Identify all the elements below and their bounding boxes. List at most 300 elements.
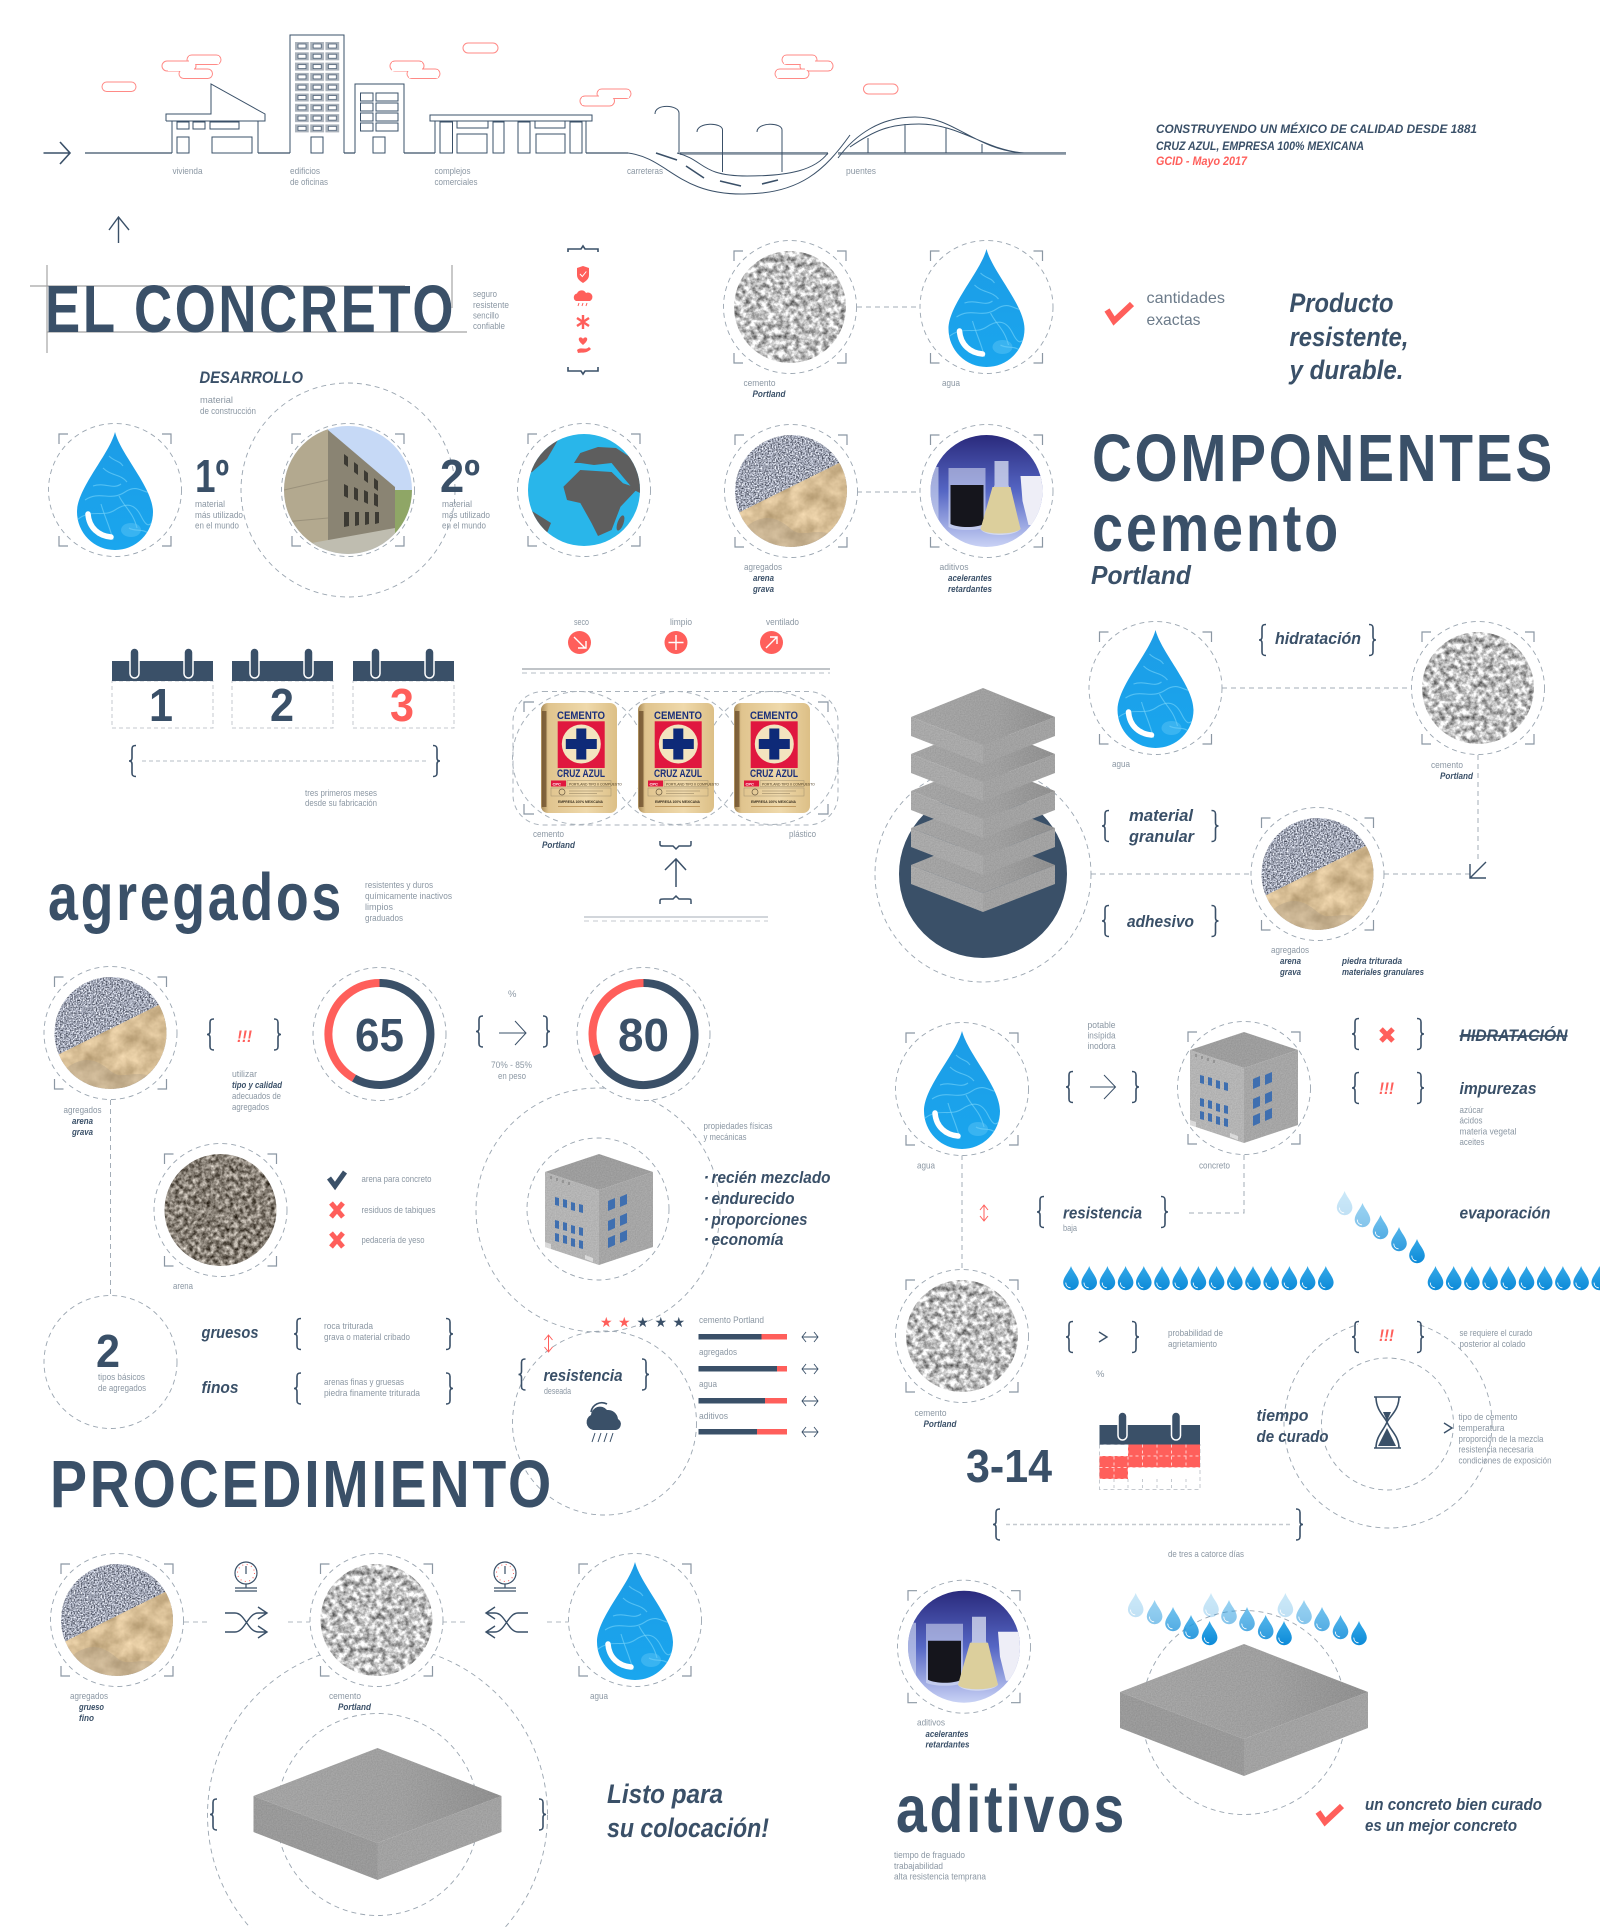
properties list: endurecido — [712, 1189, 794, 1208]
water drop — [920, 240, 1053, 374]
heading: desarrollo: DESARROLLO — [200, 368, 303, 387]
quality note: tipo y calidad — [232, 1080, 282, 1091]
sand checklist: residuos de tabiques — [362, 1205, 436, 1216]
icon: mix arrows left — [225, 1607, 267, 1638]
properties list: · — [704, 1168, 709, 1187]
ingredient labels: agua — [942, 378, 961, 389]
warning brace — [207, 1019, 281, 1050]
rating stars: ★ — [636, 1314, 649, 1330]
water properties: inodora — [1088, 1041, 1116, 1052]
falling water drops — [1128, 1593, 1367, 1645]
cement bag 1: CPC — [552, 782, 561, 786]
bag labels — [533, 829, 816, 851]
coarse aggregates: gruesos — [201, 1323, 258, 1342]
component labels: arena — [1280, 956, 1301, 967]
cement photo — [310, 1554, 443, 1686]
arrow brace: % — [508, 989, 517, 1000]
storage conditions — [568, 617, 799, 654]
procedure labels: Portland — [338, 1702, 371, 1713]
scene labels: edificios — [290, 166, 320, 177]
cement bag 1: CEMENTO — [557, 710, 605, 722]
callout: durable product: resistente, — [1290, 322, 1408, 352]
rank 1: 1º — [195, 450, 229, 502]
icon: rain cloud — [587, 1403, 621, 1442]
cement bag 1: PORTLAND TIPO II COMPUESTO — [569, 782, 622, 786]
coarse aggregates: grava o material cribado — [324, 1332, 410, 1343]
ingredient labels: retardantes — [948, 584, 992, 595]
storage conditions: ventilado — [766, 617, 799, 628]
cement bag 1: CRUZ AZUL — [557, 768, 605, 780]
dashed bag container — [512, 692, 838, 825]
additive benefits: tiempo de fraguado — [894, 1850, 965, 1861]
low strength label — [980, 1196, 1168, 1234]
donut chart 65 — [313, 968, 446, 1100]
cracking note: probabilidad de — [1168, 1328, 1223, 1339]
fine aggregates — [202, 1373, 453, 1404]
cured slab — [1120, 1644, 1368, 1776]
sand photo — [154, 1144, 287, 1276]
cement bag 3: EMPRESA 100% MEXICANA — [751, 800, 796, 804]
rank 2 — [440, 450, 490, 532]
quality note — [232, 1069, 282, 1113]
properties list: proporciones — [711, 1210, 808, 1229]
low strength label: resistencia — [1063, 1204, 1142, 1222]
ingredient labels — [744, 378, 992, 595]
curing heading — [1256, 1406, 1328, 1446]
warning brace — [1352, 1318, 1424, 1354]
cement bag 2: CEMENTO — [654, 710, 702, 722]
rank 2: material — [442, 499, 472, 510]
callout: durable product — [1288, 288, 1408, 385]
heading: agregados: graduados — [365, 913, 403, 924]
cement bag 3: CEMENTO — [750, 710, 798, 722]
cracking note — [1066, 1322, 1223, 1380]
coarse aggregates: roca triturada — [324, 1321, 374, 1332]
component labels: materiales granulares — [1342, 967, 1424, 978]
component labels: agua — [1112, 759, 1131, 770]
bridge — [838, 117, 1024, 158]
impurities: materia vegetal — [1460, 1126, 1516, 1138]
additives labels — [917, 1718, 970, 1750]
ingredient labels: agregados — [744, 562, 782, 573]
heading: agregados: químicamente inactivos — [365, 891, 452, 902]
curing factors — [1444, 1412, 1552, 1466]
bar chart: mix proportions: agregados — [699, 1347, 737, 1358]
photo: concrete building — [282, 424, 414, 556]
procedure labels: fino — [79, 1713, 94, 1724]
dashed circle behind slab — [1142, 1610, 1346, 1814]
ingredient labels: cemento — [744, 378, 776, 389]
icon: gauge left — [235, 1562, 257, 1591]
low strength label: baja — [1063, 1223, 1078, 1234]
water properties: potable — [1088, 1020, 1116, 1031]
cement bag 2: CPC — [650, 782, 658, 786]
procedure labels: agua — [590, 1691, 609, 1702]
three month brace: desde su fabricación — [305, 798, 377, 809]
heading: desarrollo: material — [200, 395, 233, 406]
cement photo — [1412, 622, 1544, 754]
icon: hourglass — [1374, 1397, 1401, 1448]
hydration label: hidratación — [1275, 629, 1361, 648]
callout: exact quantities: exactas — [1146, 312, 1200, 329]
ingredient labels: Portland — [752, 389, 786, 400]
water labels: cemento — [914, 1408, 946, 1419]
aggregates photo — [1251, 808, 1384, 940]
corner arrow — [1470, 862, 1486, 878]
component labels — [1112, 759, 1473, 978]
cement photo — [896, 1270, 1028, 1402]
header tagline: GCID - Mayo 2017 — [1156, 154, 1248, 168]
heading: agregados: agregados — [48, 860, 344, 935]
cement bag 3: CPC — [746, 782, 754, 786]
callout: exact quantities: cantidades — [1146, 290, 1225, 307]
evaporation: evaporación — [1460, 1204, 1550, 1222]
entry arrow — [44, 142, 70, 164]
calendar 3 — [353, 648, 454, 731]
procedure labels — [70, 1691, 609, 1724]
properties list: economía — [712, 1230, 784, 1249]
curing time brace: de tres a catorce días — [1168, 1549, 1244, 1560]
properties list: recién mezclado — [712, 1168, 830, 1187]
rating stars — [600, 1314, 685, 1330]
additive benefits: alta resistencia temprana — [894, 1872, 987, 1882]
calendar 1: 1 — [149, 679, 173, 731]
panel: desired strength — [512, 1314, 818, 1515]
icon: mix arrows right — [486, 1607, 528, 1638]
properties list — [704, 1121, 830, 1249]
additives labels: aditivos — [917, 1718, 945, 1729]
house — [166, 84, 265, 153]
three month brace — [129, 746, 440, 809]
header tagline: CRUZ AZUL, EMPRESA 100% MEXICANA — [1156, 139, 1364, 153]
storage conditions: seco — [574, 617, 589, 628]
stat: 3-14 days: 3-14 — [966, 1440, 1052, 1492]
rating stars: ★ — [672, 1314, 685, 1330]
curing factors: resistencia necesaria — [1458, 1444, 1534, 1456]
bar chart: mix proportions: aditivos — [699, 1411, 728, 1422]
cracking note: % — [1096, 1369, 1105, 1380]
curing factors: tipo de cemento — [1458, 1412, 1518, 1423]
water labels: agua — [917, 1160, 936, 1172]
title attributes: confiable — [473, 321, 505, 332]
aggregates label: agregados — [64, 1105, 102, 1116]
component labels: grava — [1279, 967, 1301, 978]
strength label: resistencia — [544, 1366, 622, 1385]
bar chart: mix proportions: cemento Portland — [699, 1315, 764, 1326]
procedure labels: agregados — [70, 1691, 108, 1702]
water drop — [1089, 622, 1222, 754]
bar chart: mix proportions: agua — [699, 1379, 718, 1390]
water labels: Portland — [924, 1419, 957, 1430]
scene labels — [172, 166, 876, 188]
impurities: azúcar — [1460, 1105, 1484, 1116]
properties list: · — [704, 1189, 709, 1208]
water drop — [896, 1022, 1028, 1156]
granular label: granular — [1128, 827, 1195, 846]
rating stars: ★ — [600, 1314, 613, 1330]
bag labels: Portland — [542, 840, 575, 851]
rating stars: ★ — [654, 1314, 667, 1330]
donut chart 80 — [577, 968, 710, 1100]
calendar 1 — [112, 648, 213, 731]
additive benefits — [894, 1850, 987, 1882]
calendar: curing days — [1100, 1412, 1200, 1490]
callout: exact quantities — [1107, 290, 1225, 329]
additives labels: retardantes — [926, 1740, 970, 1750]
impurities: ácidos — [1460, 1116, 1483, 1126]
aggregates photo — [44, 966, 177, 1100]
bar chart: mix proportions — [698, 1315, 818, 1437]
header tagline: CONSTRUYENDO UN MÉXICO DE CALIDAD DESDE 1881 — [1156, 121, 1477, 136]
heading: componentes: cemento — [1092, 491, 1341, 566]
aggregates photo — [50, 1554, 184, 1686]
additives photo — [898, 1580, 1030, 1713]
title attributes — [473, 289, 509, 332]
water labels — [914, 1160, 1230, 1430]
calendar 3: 3 — [390, 679, 414, 731]
properties list: propiedades físicas — [704, 1121, 773, 1132]
icon: water drop — [48, 424, 182, 556]
adhesive label: adhesivo — [1127, 912, 1194, 931]
component labels: Portland — [1440, 771, 1473, 782]
cityscape line illustration — [44, 35, 1066, 194]
heading: desarrollo — [200, 368, 303, 417]
strength label: deseada — [544, 1386, 572, 1397]
rank 2: en el mundo — [442, 520, 486, 532]
title attributes: sencillo — [473, 310, 499, 322]
attribute icons column — [568, 246, 598, 374]
sand checklist: pedacería de yeso — [362, 1235, 424, 1246]
storage conditions: limpio — [670, 617, 692, 628]
aggregates photo — [724, 424, 858, 558]
concrete slab — [254, 1748, 502, 1880]
component labels: cemento — [1431, 760, 1463, 771]
sand checklist — [329, 1172, 436, 1247]
adhesive label — [1102, 906, 1218, 936]
closing check message: es un mejor concreto — [1365, 1816, 1517, 1835]
commercial complex — [430, 115, 592, 153]
three month brace: tres primeros meses — [305, 788, 377, 799]
arrow brace — [1066, 1072, 1139, 1102]
procedure labels: cemento — [329, 1691, 361, 1702]
water properties — [1088, 1020, 1116, 1052]
cement bag 3: CRUZ AZUL — [750, 768, 798, 780]
ingredient labels: aditivos — [940, 562, 969, 573]
rank 1 — [195, 450, 243, 532]
ingredient labels: acelerantes — [948, 573, 992, 584]
panel: ingredients grid — [724, 240, 1053, 595]
quality note: agregados — [232, 1102, 269, 1113]
procedure labels: grueso — [78, 1702, 104, 1713]
properties list: · — [704, 1230, 709, 1249]
arrow brace — [476, 989, 550, 1082]
impurities: aceites — [1460, 1137, 1485, 1148]
two basic types: de agregados — [98, 1383, 146, 1394]
sand checklist: arena para concreto — [362, 1174, 432, 1185]
callout: durable product: Producto — [1290, 288, 1394, 318]
water drop rows — [1063, 1266, 1600, 1290]
isometric building — [545, 1154, 653, 1265]
sand label: arena — [173, 1281, 194, 1292]
evaporation — [1337, 1191, 1550, 1263]
panel: additives — [894, 1580, 1542, 1882]
brace and up arrow — [660, 841, 691, 904]
panel: calendars — [112, 648, 454, 809]
title attributes: seguro — [473, 289, 497, 300]
concrete building — [1178, 1022, 1310, 1154]
two basic types: tipos básicos — [98, 1372, 145, 1383]
no hydration — [1352, 1018, 1568, 1050]
ground line — [85, 152, 1066, 154]
impurities — [1352, 1072, 1536, 1148]
dashed circles — [1284, 1320, 1492, 1528]
quality note: utilizar — [232, 1069, 257, 1080]
warning brace: !!! — [237, 1027, 252, 1046]
additives labels: acelerantes — [926, 1729, 968, 1740]
coarse aggregates — [201, 1318, 453, 1350]
additives photo — [920, 424, 1053, 558]
icon: gauge right — [494, 1562, 516, 1591]
panel: cement hydration — [875, 622, 1544, 982]
curing factors: proporción de la mezcla — [1458, 1434, 1544, 1445]
rank 2: más utilizado — [442, 510, 490, 521]
cracking note: agrietamiento — [1168, 1339, 1217, 1350]
properties list: · — [704, 1210, 709, 1229]
panel: cement storage — [512, 617, 838, 921]
curing note — [1460, 1328, 1532, 1350]
cement bag 2: CRUZ AZUL — [654, 768, 702, 780]
panel: procedure — [50, 1554, 702, 1928]
curing note: posterior al colado — [1460, 1339, 1526, 1350]
big dashed circles — [208, 1645, 548, 1928]
arrow brace: en peso — [498, 1071, 526, 1082]
heading: desarrollo: de construcción — [200, 406, 256, 417]
curing factors: condiciones de exposición — [1458, 1456, 1552, 1466]
cement bag 3 — [734, 703, 815, 813]
scene labels: vivienda — [172, 166, 203, 177]
big dashed circle: properties — [476, 1088, 720, 1332]
callout: durable product: y durable. — [1288, 355, 1404, 385]
impurities: impurezas — [1460, 1079, 1536, 1098]
water labels: concreto — [1199, 1160, 1230, 1172]
icon: globe — [518, 424, 650, 556]
cement photo — [724, 240, 856, 374]
impurities: !!! — [1379, 1079, 1394, 1098]
panel: curing time — [966, 1318, 1552, 1560]
two basic types — [44, 1296, 177, 1428]
curing note: se requiere el curado — [1460, 1328, 1532, 1339]
aggregates label — [64, 1105, 102, 1138]
properties list: y mecánicas — [704, 1132, 747, 1143]
up arrow — [109, 217, 129, 243]
granular label — [1102, 806, 1218, 846]
aggregates label: grava — [71, 1127, 93, 1138]
scene labels: puentes — [846, 166, 876, 177]
cement bag 2: PORTLAND TIPO II COMPUESTO — [666, 782, 719, 786]
heading: componentes: Portland — [1091, 560, 1192, 590]
arrow brace: 70% - 85% — [491, 1060, 532, 1071]
fine aggregates: piedra finamente triturada — [324, 1388, 421, 1399]
fine aggregates: finos — [202, 1378, 238, 1397]
heading: procedimiento: PROCEDIMIENTO — [50, 1447, 554, 1522]
title attributes: resistente — [473, 300, 509, 311]
title: el concreto: EL CONCRETO — [45, 272, 456, 347]
office towers — [290, 35, 404, 153]
cement bag 3: PORTLAND TIPO II COMPUESTO — [762, 782, 815, 786]
callout: ready to place: su colocación! — [607, 1813, 769, 1843]
additive benefits: trabajabilidad — [894, 1861, 943, 1872]
closing check message: un concreto bien curado — [1365, 1795, 1542, 1814]
donut chart 80: 80 — [618, 1009, 669, 1061]
ingredient labels: grava — [752, 584, 774, 595]
heading: agregados: limpios — [365, 902, 393, 913]
aggregates label: arena — [72, 1116, 93, 1127]
header tagline — [1156, 121, 1477, 168]
cement bag 2: EMPRESA 100% MEXICANA — [655, 800, 700, 804]
cement bag 2 — [638, 703, 719, 813]
heading: componentes — [1091, 421, 1555, 590]
bag labels: cemento — [533, 829, 564, 840]
bag labels: plástico — [789, 829, 816, 840]
heading: agregados: resistentes y duros — [365, 880, 433, 891]
highway and lamps — [628, 106, 850, 194]
scene labels: de oficinas — [290, 177, 328, 188]
callout: ready to place — [607, 1779, 769, 1843]
cement bag 1 — [541, 703, 622, 813]
clouds — [102, 43, 898, 106]
rank 1: en el mundo — [195, 520, 239, 532]
slab brace — [210, 1799, 546, 1830]
calendar 2 — [232, 648, 333, 731]
ingredient labels: arena — [753, 573, 774, 584]
component labels: agregados — [1271, 945, 1309, 956]
fine aggregates: arenas finas y gruesas — [324, 1377, 404, 1388]
no hydration: HIDRATACIÓN — [1460, 1026, 1568, 1045]
curing heading: de curado — [1256, 1427, 1328, 1446]
panel: water quality — [896, 1018, 1600, 1430]
component labels: piedra triturada — [1341, 956, 1402, 967]
curing factors: temperatura — [1458, 1423, 1505, 1434]
quality note: adecuados de — [232, 1091, 281, 1102]
curing time brace — [993, 1509, 1303, 1560]
panel: aggregates — [44, 966, 830, 1428]
scene labels: complejos — [434, 166, 471, 177]
closing check message — [1318, 1795, 1542, 1835]
red strength arrow — [544, 1335, 552, 1352]
hydration label — [1259, 624, 1376, 656]
scene labels: comerciales — [434, 177, 478, 188]
water drop — [568, 1554, 702, 1686]
cement bag 1: EMPRESA 100% MEXICANA — [558, 800, 603, 804]
strength label — [518, 1359, 649, 1397]
donut chart 65: 65 — [355, 1009, 404, 1061]
panel: development ranking — [48, 383, 650, 597]
granular label: material — [1129, 806, 1194, 825]
water properties: insípida — [1088, 1030, 1116, 1042]
warning brace: !!! — [1379, 1326, 1394, 1345]
two basic types: 2 — [96, 1325, 120, 1377]
calendar 2: 2 — [270, 679, 294, 731]
curing heading: tiempo — [1256, 1406, 1308, 1425]
callout: ready to place: Listo para — [607, 1779, 723, 1809]
title: el concreto — [30, 265, 467, 353]
rank 1: más utilizado — [195, 510, 243, 521]
scene labels: carreteras — [627, 166, 663, 177]
rating stars: ★ — [618, 1314, 631, 1330]
rank 2: 2º — [440, 450, 480, 502]
rank 1: material — [195, 499, 225, 510]
dark circle backdrop — [875, 766, 1091, 982]
